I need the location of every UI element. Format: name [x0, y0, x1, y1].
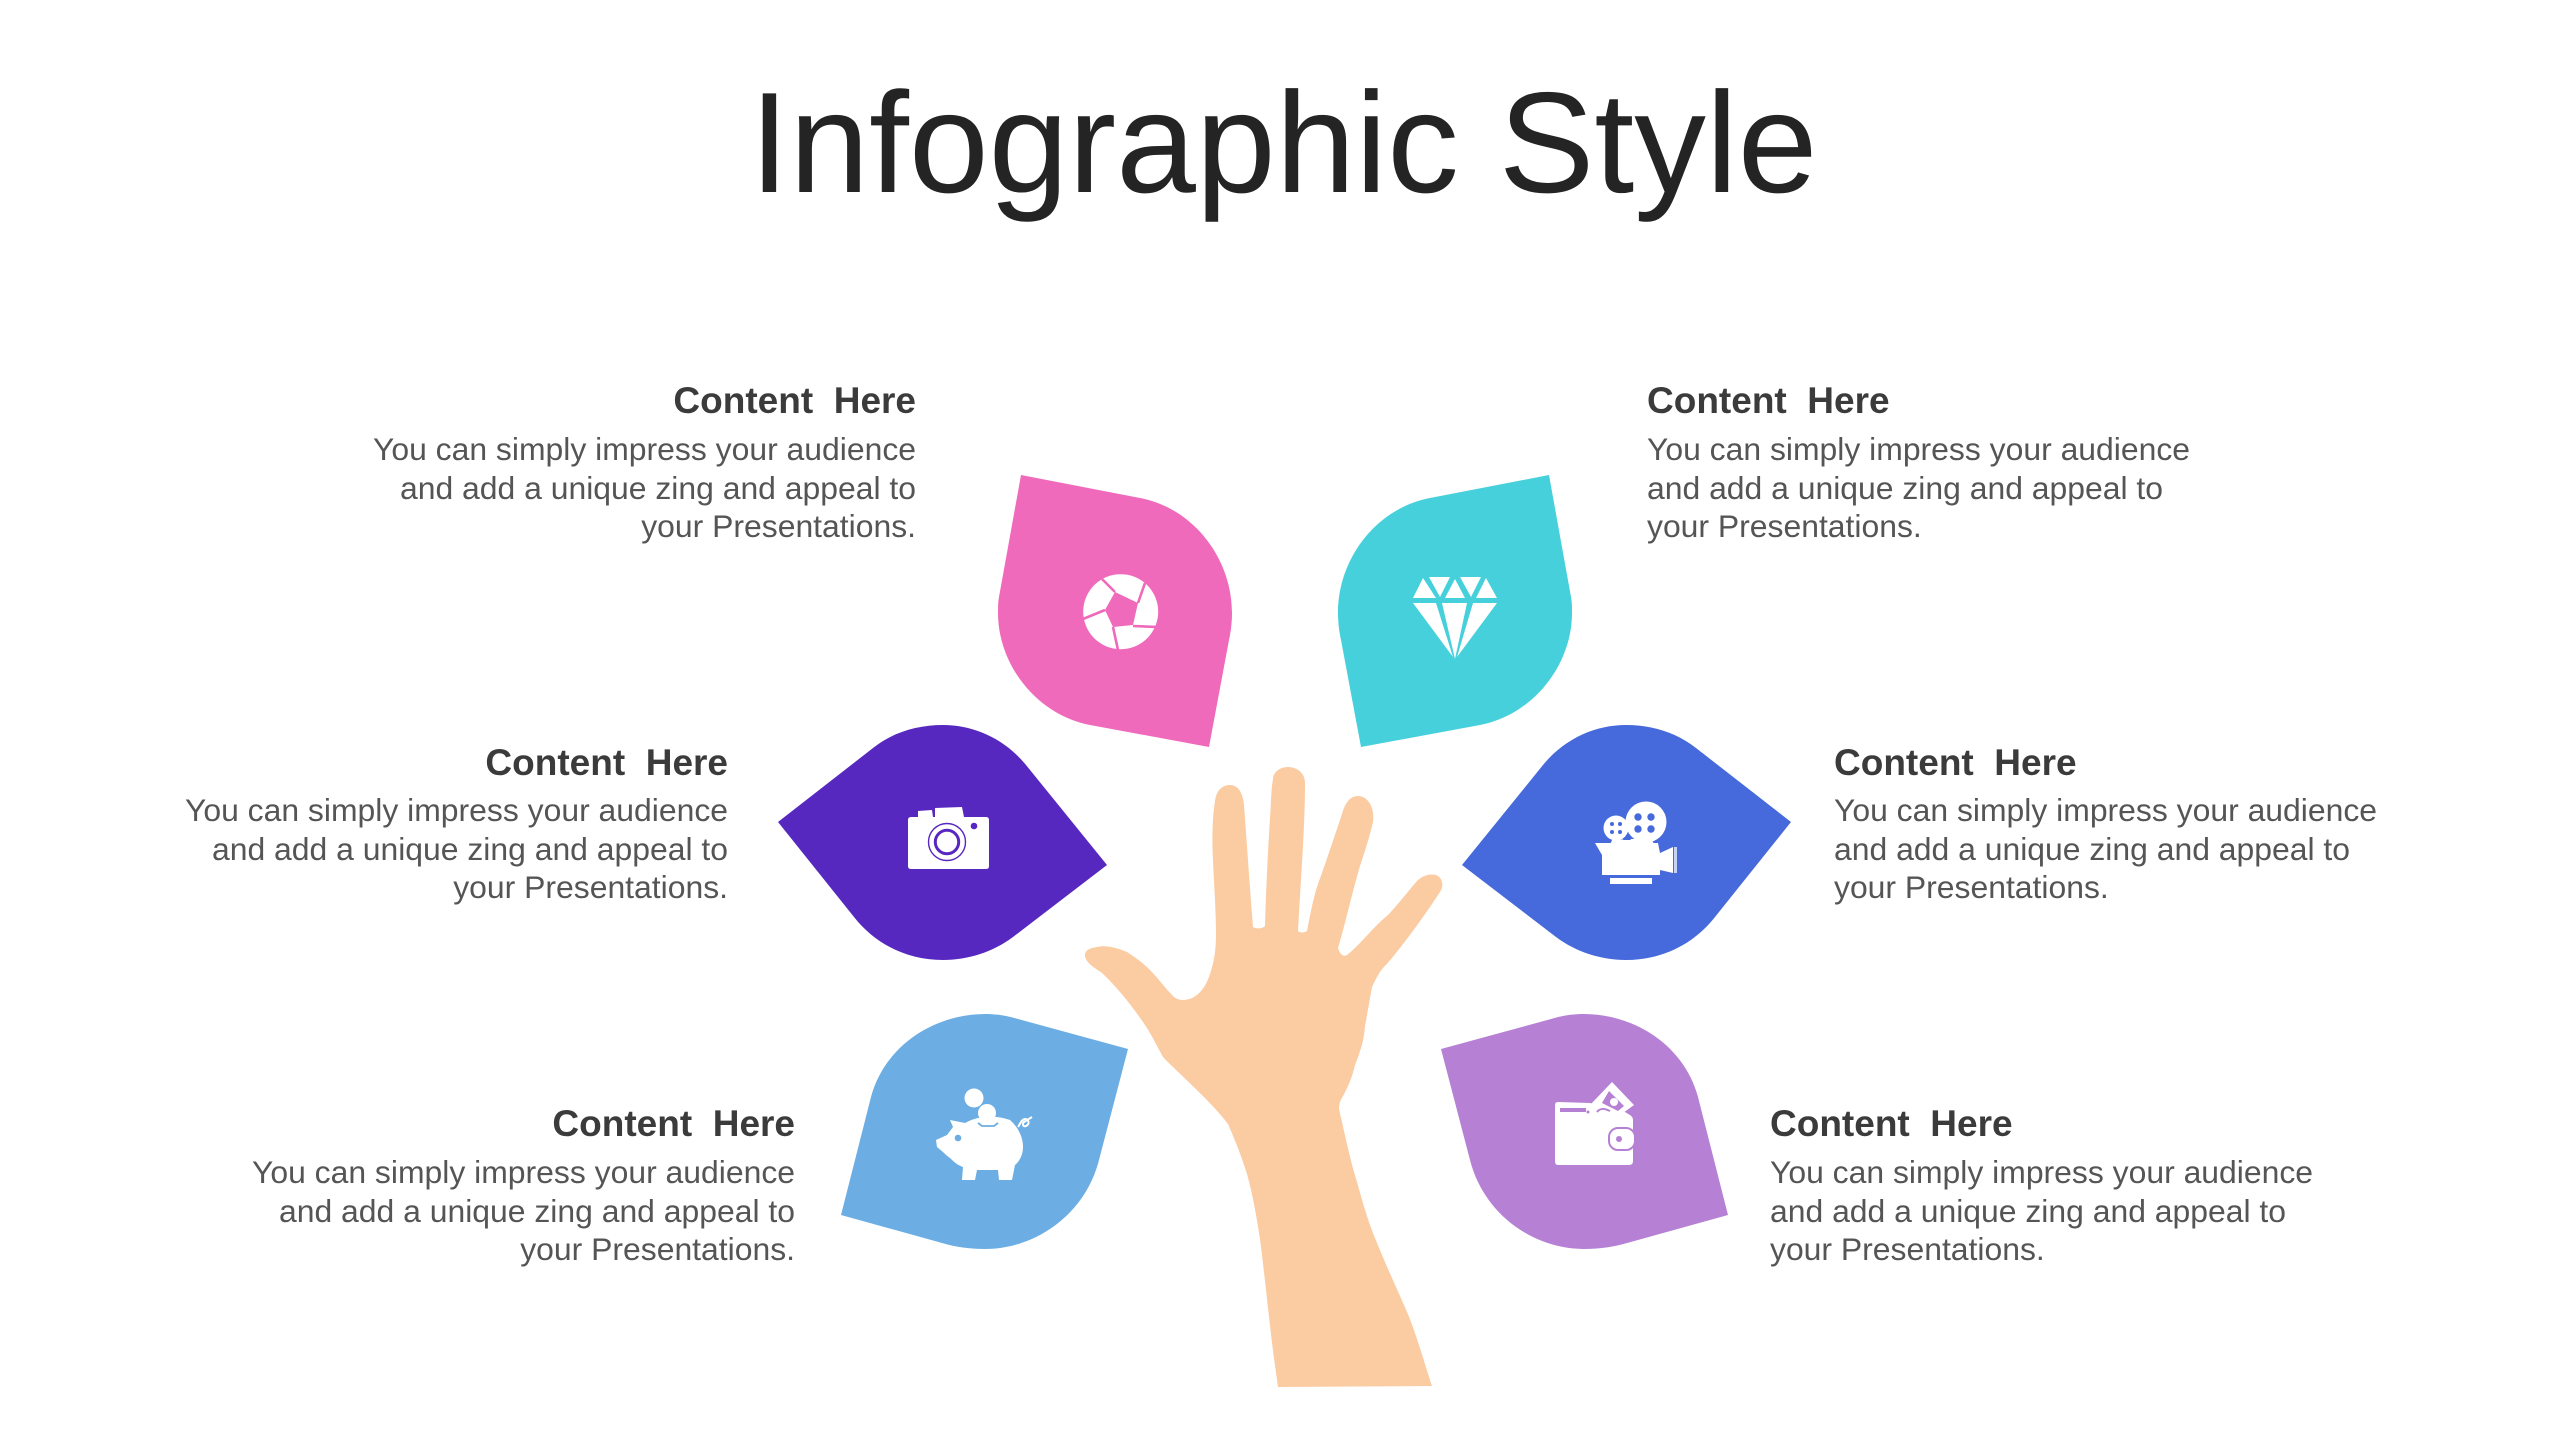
text block: top left: Content Here [673, 380, 916, 421]
text block: top right: You can simply impress your audience [1647, 431, 2190, 467]
text block: bottom right [1770, 1103, 2313, 1267]
text block: top right [1647, 380, 2190, 544]
icon: movie camera [1595, 802, 1677, 884]
title: Infographic Style [750, 63, 1817, 223]
icon: wallet [1555, 1082, 1635, 1165]
text block: top left: and add a unique zing and appeal to [400, 470, 916, 506]
text block: middle left [185, 742, 728, 905]
hand [1085, 767, 1442, 1387]
text block: bottom left: and add a unique zing and appeal to [279, 1193, 795, 1229]
icon: diamond [1413, 577, 1497, 659]
icon: camera [908, 807, 989, 869]
text block: top right: and add a unique zing and appeal to [1647, 470, 2163, 506]
text block: middle left: your Presentations. [453, 869, 728, 905]
text block: bottom right: and add a unique zing and appeal to [1770, 1193, 2286, 1229]
text block: middle left: and add a unique zing and appeal to [212, 831, 728, 867]
icon: aperture [1083, 574, 1158, 650]
text block: top right: Content Here [1647, 380, 1890, 421]
text block: middle right [1834, 742, 2377, 905]
text block: top left: your Presentations. [641, 508, 916, 544]
text block: bottom right: your Presentations. [1770, 1231, 2045, 1267]
petal: light blue [841, 1014, 1128, 1249]
text block: bottom right: You can simply impress your audience [1770, 1154, 2313, 1190]
text block: bottom left [252, 1103, 795, 1267]
text block: middle right: and add a unique zing and appeal to [1834, 831, 2350, 867]
text block: bottom left: Content Here [552, 1103, 795, 1144]
petal: purple [778, 725, 1107, 960]
petal: pink [998, 475, 1232, 747]
text block: bottom right: Content Here [1770, 1103, 2013, 1144]
icon: piggy bank [936, 1088, 1032, 1180]
petal: teal [1338, 475, 1572, 747]
petal: blue [1462, 725, 1791, 960]
text block: top left [373, 380, 916, 544]
text block: top right: your Presentations. [1647, 508, 1922, 544]
text block: bottom left: your Presentations. [520, 1231, 795, 1267]
text block: middle right: Content Here [1834, 742, 2077, 783]
text block: middle left: Content Here [485, 742, 728, 783]
text block: middle right: You can simply impress your audience [1834, 792, 2377, 828]
text block: bottom left: You can simply impress your audience [252, 1154, 795, 1190]
petal: lilac [1441, 1014, 1728, 1249]
text block: middle left: You can simply impress your audience [185, 792, 728, 828]
text block: middle right: your Presentations. [1834, 869, 2109, 905]
text block: top left: You can simply impress your audience [373, 431, 916, 467]
